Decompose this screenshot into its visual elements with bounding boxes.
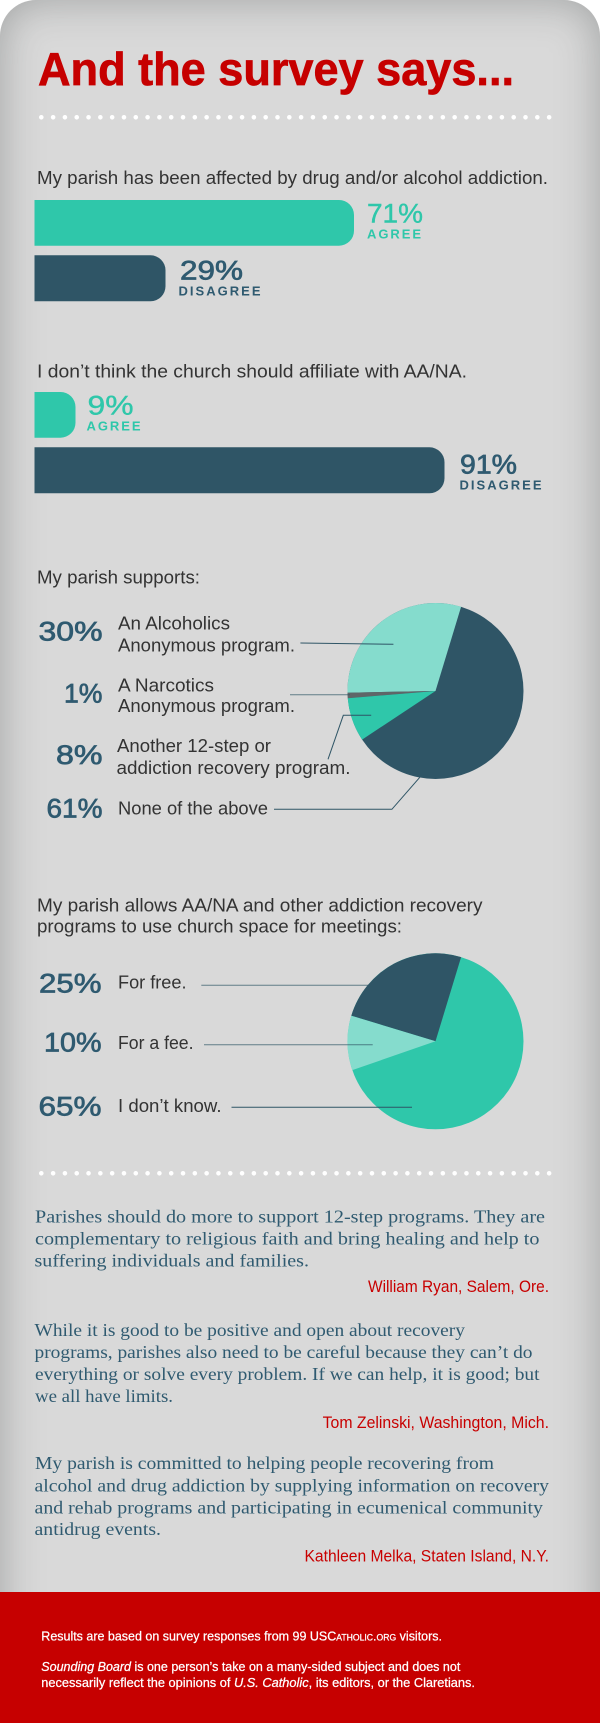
item: 25%: For free.	[118, 971, 186, 992]
item: 30%: 30%	[38, 617, 102, 647]
item: 65%: I don’t know.	[118, 1095, 222, 1116]
footer: disclaimer	[41, 1659, 475, 1690]
item: 30%	[38, 612, 393, 655]
question 1 heading: My parish has been affected by drug and/or alcohol addiction.	[37, 167, 548, 188]
quote: Kathleen Melka: and rehab programs and participating in ecumenical community	[34, 1497, 543, 1517]
item: 8%: Another 12-step or	[117, 735, 271, 756]
pie chart: church space	[347, 953, 524, 1129]
bar: 9% agree	[34, 392, 76, 438]
value: 9%: 9%	[88, 391, 134, 421]
title: And the survey says...	[38, 43, 514, 95]
panel: question 1 bar chart	[34, 167, 548, 301]
quote: William Ryan: Parishes should do more to support 12-step programs. They are	[35, 1206, 545, 1226]
quote: Kathleen Melka: antidrug events.	[34, 1519, 161, 1539]
bar: 91% disagree	[34, 447, 444, 493]
footer: disclaimer: Sounding Board is one person’s take on a many-sided subject and does not	[41, 1659, 461, 1674]
quote: Tom Zelinski: Tom Zelinski, Washington, Mich.	[323, 1413, 549, 1432]
item: 1%: Anonymous program.	[118, 695, 295, 716]
item: 8%: 8%	[56, 740, 102, 770]
item: 30%: An Alcoholics	[118, 612, 230, 633]
label: disagree: DISAGREE	[460, 478, 542, 493]
quote: Kathleen Melka: Kathleen Melka, Staten Island, N.Y.	[304, 1546, 549, 1565]
item: 8%	[56, 715, 371, 778]
pie chart: parish supports	[347, 603, 524, 779]
item: 30%: Anonymous program.	[118, 634, 295, 655]
item: 10%	[44, 1027, 373, 1057]
quote: Tom Zelinski: we all have limits.	[35, 1386, 173, 1406]
bar: 71% agree	[34, 200, 354, 246]
quote: Kathleen Melka: My parish is committed to helping people recovering from	[35, 1453, 494, 1473]
question 4 heading: My parish allows AA/NA and other addiction recovery	[37, 895, 483, 916]
question 4 heading: programs to use church space for meetings:	[37, 915, 402, 936]
question 3 heading: My parish supports:	[37, 566, 200, 587]
footer: disclaimer: necessarily reflect the opinions of U.S. Catholic, its editors, or the Claretians.	[41, 1675, 475, 1690]
panel: question 2 bar chart	[34, 360, 542, 493]
quote: Tom Zelinski: While it is good to be positive and open about recovery	[34, 1320, 465, 1340]
item: 1%: 1%	[64, 679, 102, 709]
label: disagree: DISAGREE	[178, 283, 261, 298]
quote: Kathleen Melka: alcohol and drug addiction by supplying information on recovery	[34, 1476, 549, 1496]
label: agree: AGREE	[367, 227, 421, 242]
quote: Tom Zelinski: programs, parishes also need to be careful because they can’t do	[34, 1342, 533, 1362]
panel: parish supports pie chart	[37, 566, 524, 823]
value: 71%: 71%	[367, 199, 423, 229]
item: 61%	[46, 777, 420, 823]
panel: church space pie chart	[37, 895, 524, 1129]
item: 1%	[64, 674, 350, 716]
quote: William Ryan: complementary to religious faith and bring healing and help to	[35, 1228, 540, 1248]
item: 10%: For a fee.	[118, 1032, 194, 1053]
item: 65%: 65%	[38, 1091, 102, 1121]
item: 25%: 25%	[39, 969, 102, 999]
quote: William Ryan: suffering individuals and families.	[34, 1250, 309, 1270]
value: 29%: 29%	[180, 255, 243, 285]
footer panel	[0, 1592, 600, 1723]
label: agree: AGREE	[86, 419, 141, 434]
quote: William Ryan	[34, 1206, 549, 1296]
value: 91%: 91%	[460, 450, 517, 480]
item: 10%: 10%	[44, 1027, 102, 1057]
item: 25%	[39, 969, 368, 999]
item: 8%: addiction recovery program.	[116, 757, 350, 778]
quote: William Ryan: William Ryan, Salem, Ore.	[368, 1277, 549, 1296]
quote: Kathleen Melka	[34, 1453, 549, 1565]
item: 61%: 61%	[46, 793, 102, 823]
item: 65%	[38, 1091, 412, 1121]
bar: 29% disagree	[34, 255, 166, 301]
question 4 heading	[37, 895, 483, 936]
quote: Tom Zelinski: everything or solve every problem. If we can help, it is good; but	[35, 1364, 540, 1384]
footer: survey source note: Results are based on survey responses from 99 USCatholic.org visitors.	[41, 1629, 442, 1644]
quote: Tom Zelinski	[34, 1320, 549, 1432]
question 2 heading: I don’t think the church should affiliate with AA/NA.	[37, 360, 467, 381]
item: 1%: A Narcotics	[118, 674, 214, 695]
item: 61%: None of the above	[118, 797, 268, 818]
